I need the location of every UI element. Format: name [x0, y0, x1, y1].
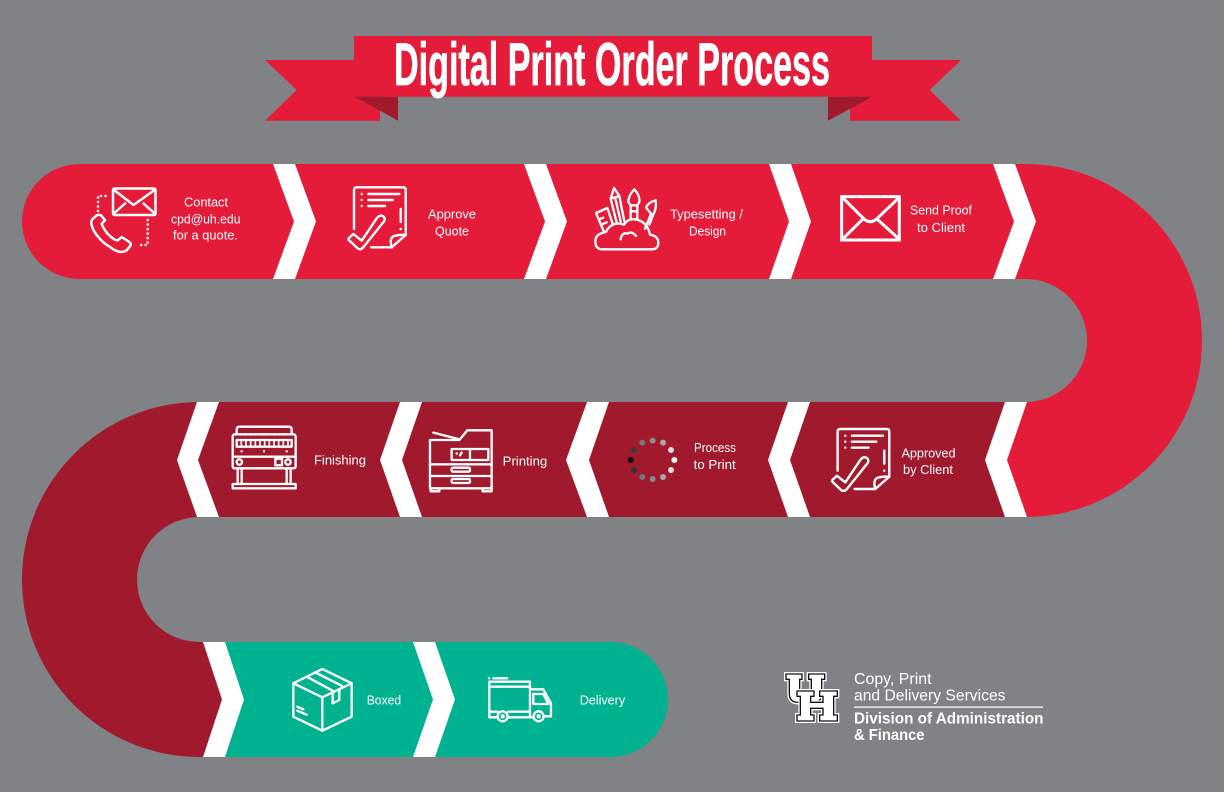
title banner — [265, 31, 961, 121]
title: Digital Print Order Process — [394, 31, 830, 98]
footer department text: Copy, Print — [854, 671, 932, 688]
footer department text: and Delivery Services — [854, 688, 1006, 705]
label: contact: for a quote. — [173, 227, 238, 242]
label: process to print: Process — [694, 440, 736, 455]
step: delivery — [489, 678, 626, 721]
step: approved by client — [832, 429, 956, 491]
step: printing — [430, 430, 547, 491]
step: process to print — [628, 438, 736, 482]
label: approved by client — [902, 445, 956, 477]
label: contact: cpd@uh.edu — [171, 211, 240, 226]
footer department text — [854, 671, 1044, 744]
white chevron dividers — [177, 164, 1036, 757]
icon: envelope and phone — [91, 188, 156, 252]
label: approve quote: Approve — [428, 207, 476, 222]
label: printing: Printing — [503, 454, 547, 469]
label: approved by client: by Client — [903, 462, 953, 477]
icon: envelope — [842, 197, 899, 240]
label: contact: Contact — [184, 195, 228, 210]
icon: loading spinner — [628, 438, 677, 482]
label: typesetting: Design — [689, 224, 726, 239]
label: process to print: to Print — [694, 457, 736, 472]
label: send proof: Send Proof — [910, 203, 972, 218]
footer department text: Division of Administration — [854, 710, 1044, 727]
label: contact — [171, 195, 240, 242]
icon: cutting machine — [233, 427, 296, 488]
green process band — [215, 642, 668, 757]
label: finishing: Finishing — [314, 453, 366, 468]
step: typesetting — [595, 188, 743, 249]
label: delivery: Delivery — [580, 693, 626, 708]
label: process to print — [694, 440, 736, 472]
footer department text: & Finance — [854, 727, 925, 744]
icon: checked document — [832, 429, 889, 491]
label: typesetting — [670, 207, 743, 239]
label: send proof — [910, 203, 972, 235]
label: approve quote — [428, 207, 476, 239]
step: send proof — [842, 197, 972, 240]
label: approved by client: Approved — [902, 445, 956, 460]
label: boxed: Boxed — [367, 693, 401, 708]
icon: pencils and cloud — [595, 188, 658, 249]
step: contact — [91, 188, 240, 252]
step: finishing — [233, 427, 366, 488]
label: send proof: to Client — [917, 220, 965, 235]
icon: checked document — [348, 187, 406, 249]
label: typesetting: Typesetting / — [670, 207, 743, 222]
dark red process band with left curve — [22, 402, 1012, 757]
icon: printer — [430, 430, 492, 491]
label: approve quote: Quote — [435, 224, 469, 239]
step: boxed — [293, 669, 401, 731]
step: approve quote — [348, 187, 476, 249]
logo: University of Houston UH mark — [786, 674, 837, 721]
icon: delivery truck — [489, 678, 551, 721]
bright red process band with right curve — [22, 164, 1202, 517]
icon: cardboard box — [293, 669, 352, 731]
